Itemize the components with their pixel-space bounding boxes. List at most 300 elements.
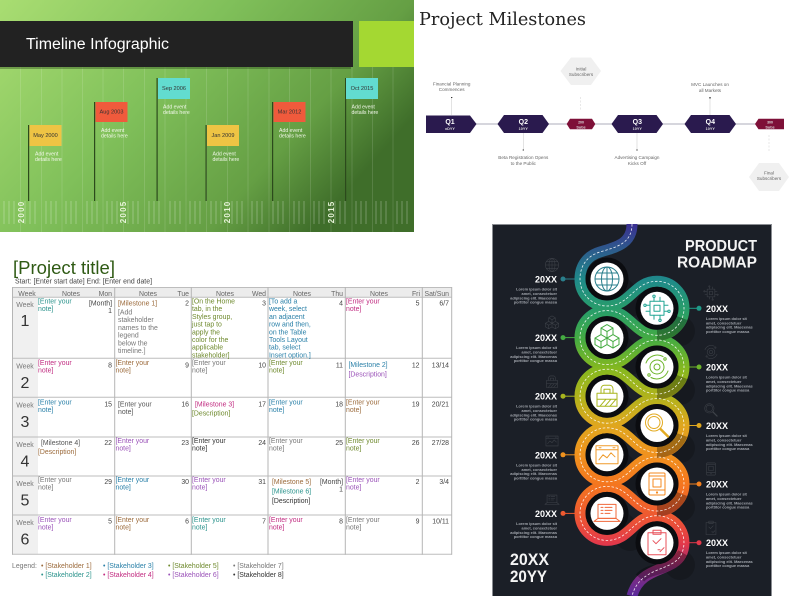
node: Q4 [684, 115, 736, 133]
week 5: 2 [416, 479, 420, 486]
milestone 1: 20XX [535, 274, 557, 284]
hexagon: final subscribers: Final [764, 170, 774, 176]
week 4: note] [116, 446, 131, 453]
week 3: 16 [181, 402, 189, 408]
week 1: note] [38, 306, 53, 313]
node: Q2: Q2 [519, 119, 528, 126]
milestone 2: Lorem ipsum dolor sit [706, 316, 748, 321]
milestone 1: porttitor congue massa [514, 300, 558, 304]
flag: Jan 2009 [206, 125, 239, 201]
node: Q2: 10YY [519, 127, 528, 131]
stems [452, 97, 710, 150]
milestone 6 [636, 404, 753, 451]
calendar table [12, 287, 452, 555]
week 5: note] [346, 485, 361, 492]
week 4: 4 [21, 454, 30, 470]
milestone 6: amet, consectetuer [706, 438, 742, 442]
week 2 [16, 360, 449, 392]
panel: timeline infographic [0, 0, 414, 232]
week 2: note] [192, 368, 207, 375]
node: 300 subs [755, 119, 784, 129]
week 1: 1 [108, 308, 112, 315]
week 4: 23 [181, 440, 189, 447]
flag: Jan 2009: Jan 2009 [211, 133, 235, 139]
legend: • [Stakeholder 7] [233, 563, 284, 570]
flag: Sep 2006: details here [163, 110, 190, 116]
week 6: note] [38, 525, 53, 532]
week 6: [Enter your [192, 517, 226, 524]
week 2: 13/14 [432, 362, 449, 370]
header row: Notes [370, 291, 389, 298]
milestone 8: adipiscing elit. Maecenas [706, 500, 753, 505]
header row: Wed [252, 291, 266, 298]
week 1: below the [118, 340, 148, 347]
week 3: 19 [412, 402, 420, 408]
week 4: 26 [412, 440, 420, 447]
week 2: [Enter your [192, 360, 226, 367]
milestone 2 [636, 286, 753, 334]
panel: product roadmap [492, 224, 772, 596]
week 5: 30 [181, 479, 189, 486]
node: 200 subs: Subs [576, 125, 586, 129]
milestone 2: adipiscing elit. Maecenas [706, 325, 753, 330]
header row: Week [18, 291, 36, 298]
week 1: stakeholder] [192, 352, 230, 359]
milestone 4: amet, consectetuer [706, 379, 742, 384]
milestone 5: porttitor congue massa [514, 417, 558, 422]
week 5: [Milestone 6] [272, 488, 311, 496]
milestone 9: porttitor congue massa [514, 534, 558, 539]
title: ROADMAP [677, 254, 757, 272]
date line: Start: [Enter start date] End: [Enter end date] [15, 278, 152, 286]
flag: Oct 2015 [345, 78, 378, 201]
year axis labels: 2015 [327, 201, 336, 223]
week 6: 7 [262, 518, 266, 526]
node: Q1 [426, 116, 476, 133]
week 6: 6 [21, 532, 30, 548]
week 1: just tap to [191, 322, 222, 329]
year axis labels [17, 201, 336, 223]
week 3: note] [269, 407, 284, 414]
header row: Fri [412, 291, 420, 298]
week 1: stakeholder [118, 317, 154, 324]
flag: Sep 2006: Sep 2006 [162, 86, 186, 92]
week 6: [Enter your [38, 517, 72, 524]
panel: project calendar [12, 257, 452, 579]
milestone 1 [510, 258, 628, 304]
week 2: [Enter your [116, 360, 149, 367]
week 4: [Enter your [192, 438, 226, 445]
milestone 3: amet, consectetuer [522, 350, 557, 354]
node: Q1: xDYY [445, 127, 455, 131]
legend [12, 563, 284, 579]
week 5: 3/4 [439, 479, 449, 486]
week 2: [Enter your [38, 360, 72, 367]
week 1: 1 [21, 313, 30, 330]
header row: Sat/Sun [424, 291, 449, 298]
milestone 8: Lorem ipsum dolor sit [706, 492, 748, 496]
week 1: legend [118, 333, 139, 340]
milestone 7: amet, consectetuer [522, 467, 557, 472]
milestone 1: Lorem ipsum dolor sit [516, 286, 558, 292]
node: Q4: Q4 [706, 119, 715, 126]
week 1: names to the [118, 325, 158, 332]
week 5: 29 [104, 479, 112, 486]
milestone 9: Lorem ipsum dolor sit [516, 521, 558, 526]
week 6: note] [116, 525, 131, 532]
week 1: 2 [185, 300, 189, 308]
week 5: 5 [21, 492, 30, 510]
flag: Jan 2009: Add event [212, 152, 236, 158]
week 6: note] [269, 525, 284, 532]
week 1: week, select [268, 306, 307, 313]
flag: Oct 2015: Add event [352, 104, 375, 110]
flag: May 2000: May 2000 [33, 133, 58, 139]
week 6: note] [346, 525, 361, 532]
flag: Mar 2012: Mar 2012 [278, 110, 301, 116]
week 5: [Enter your [346, 477, 380, 484]
week 4: note] [346, 446, 361, 453]
week 5: Week [16, 481, 34, 488]
header row: Notes [293, 291, 312, 298]
node: Q4: 10YY [706, 127, 715, 131]
header row: Mon [99, 291, 112, 298]
title: PRODUCT [685, 238, 757, 255]
milestone 10: adipiscing elit. Maecenas [706, 559, 753, 564]
circle shadows [607, 279, 680, 565]
week 3: [Milestone 3] [195, 402, 234, 408]
week 1: [Add [118, 310, 132, 316]
flag: Jan 2009: details here [212, 157, 239, 163]
week 5 [16, 477, 449, 510]
week 1: 3 [262, 300, 266, 308]
week 6: [Enter your [269, 517, 303, 524]
header row: Tue [177, 291, 189, 298]
milestone 3: Lorem ipsum dolor sit [516, 345, 558, 350]
timeline connector [476, 123, 756, 125]
week 2: 10 [258, 362, 266, 370]
milestone 4 [636, 345, 753, 392]
milestone 3: porttitor congue massa [514, 358, 558, 363]
week 5: [Description] [272, 498, 310, 505]
milestone 5: Lorem ipsum dolor sit [516, 404, 558, 409]
flag: May 2000: Add event [35, 152, 59, 158]
milestone 10: 20XX [706, 538, 728, 548]
flag: Aug 2003: details here [101, 134, 128, 140]
week 1: tab, in the [192, 306, 222, 313]
flag: Sep 2006: Add event [163, 104, 187, 110]
week 5: [Enter your [116, 477, 149, 484]
week 2: note] [38, 368, 53, 375]
week 4: 24 [258, 440, 266, 447]
date range: 20YY [510, 568, 547, 586]
legend: • [Stakeholder 4] [103, 572, 154, 579]
week 1: [To add a [269, 298, 297, 306]
week 1: [Milestone 1] [118, 300, 157, 308]
legend: • [Stakeholder 8] [233, 572, 284, 579]
week 5: [Enter your [192, 477, 226, 484]
milestone 4: Lorem ipsum dolor sit [706, 374, 748, 380]
legend: Legend: [12, 563, 37, 570]
legend: • [Stakeholder 6] [168, 572, 219, 579]
week 3: note] [118, 409, 133, 416]
week 3: [Enter your [118, 402, 152, 408]
label: beta registration: to the Public [511, 161, 537, 166]
milestone 3: adipiscing elit. Maecenas [510, 354, 557, 359]
label: beta registration: Beta Registration Opens [498, 155, 549, 160]
hexagon: final subscribers: Subscribers [757, 176, 782, 181]
milestone 7: Lorem ipsum dolor sit [516, 462, 558, 467]
node: 300 subs: Subs [765, 125, 775, 129]
week 5: note] [38, 485, 53, 492]
flag: Aug 2003: Add event [101, 128, 125, 134]
flag: Mar 2012: details here [279, 134, 306, 140]
year axis labels: 2010 [223, 201, 232, 223]
header row: Thu [331, 291, 343, 298]
milestone 5 [510, 375, 628, 422]
week 2: [Milestone 2] [348, 362, 388, 369]
hexagon: initial subscribers: Initial [576, 66, 586, 72]
week 6: [Enter your [346, 517, 380, 524]
flag: Oct 2015: details here [352, 110, 378, 116]
flag: May 2000: details here [35, 157, 62, 163]
project title: [Project title] [13, 257, 115, 278]
week 5: [Milestone 5] [272, 479, 311, 486]
legend: • [Stakeholder 2] [41, 572, 92, 579]
flag: Mar 2012 [272, 102, 306, 201]
milestone 8: amet, consectetuer [706, 496, 742, 501]
week 2: Week [16, 364, 34, 370]
date range [510, 551, 549, 586]
node: 200 subs [567, 119, 595, 129]
header row: Notes [62, 291, 81, 298]
week 6: 9 [416, 518, 420, 526]
week 1: Styles group, [192, 314, 232, 321]
week 6: [Enter your [116, 517, 149, 524]
week 5: [Enter your [38, 477, 72, 484]
week 6 [16, 517, 449, 548]
week 1: 6/7 [439, 300, 449, 308]
week 3 [16, 400, 449, 431]
milestone 3 [510, 316, 628, 363]
title: Timeline Infographic [26, 36, 169, 53]
label: advertising campaign: Advertising Campaign [615, 155, 660, 160]
header row: Notes [216, 291, 235, 298]
week 2: note] [116, 368, 131, 375]
week 1: 5 [416, 300, 420, 308]
year axis labels: 2000 [17, 201, 26, 223]
week 1: timeline.] [118, 348, 146, 355]
legend: • [Stakeholder 3] [103, 563, 154, 570]
week 5: note] [116, 485, 131, 492]
week 6: 8 [339, 518, 343, 526]
label: MVC launches [691, 82, 729, 93]
panel: project milestones [419, 9, 789, 191]
week 1: apply the [192, 329, 220, 336]
week 1 [16, 298, 449, 359]
legend: • [Stakeholder 1] [41, 563, 92, 570]
week 4: [Description] [38, 449, 76, 456]
node: 300 subs: 300 [767, 120, 773, 124]
title: Project Milestones [419, 9, 586, 30]
label: MVC launches: MVC Launches on [691, 82, 729, 87]
milestone 3: 20XX [535, 333, 557, 343]
week 3: [Description] [192, 410, 230, 418]
week 1: tab, select [269, 345, 300, 352]
week 6: note] [192, 525, 207, 532]
week 4: 22 [104, 440, 112, 447]
week 6: 10/11 [432, 518, 449, 526]
week 1: color for the [192, 337, 229, 344]
label: advertising campaign: Kicks Off [628, 161, 647, 166]
flag: May 2000 [28, 125, 62, 201]
milestone 10: porttitor congue massa [706, 563, 750, 568]
week 4: note] [269, 446, 284, 453]
week 6: Week [16, 520, 34, 527]
week 2: 12 [412, 362, 420, 370]
milestone 7 [510, 433, 628, 480]
milestone 2: amet, consectetuer [706, 320, 742, 325]
week 3: note] [38, 407, 53, 414]
header bar [0, 21, 353, 69]
week 1: 4 [339, 300, 343, 308]
milestone 9 [510, 492, 628, 539]
milestone 4: porttitor congue massa [706, 388, 750, 392]
milestone 10 [636, 521, 753, 568]
milestone 5: 20XX [535, 392, 557, 402]
week 3: 20/21 [432, 402, 449, 408]
week 6: 6 [185, 518, 189, 526]
week 3: 3 [21, 414, 30, 431]
milestone 9: adipiscing elit. Maecenas [510, 530, 557, 535]
milestone 4: adipiscing elit. Maecenas [706, 383, 753, 388]
week 1: [On the Home [192, 298, 235, 306]
week 1: Insert option.] [269, 352, 311, 359]
milestone 9: 20XX [535, 509, 557, 519]
week 4: [Enter your [346, 438, 380, 445]
label: financial planning: Financial Planning [433, 82, 471, 86]
week 4: [Enter your [269, 438, 303, 445]
milestone 6: 20XX [706, 421, 728, 431]
milestone 7: 20XX [535, 450, 557, 460]
legend: • [Stakeholder 5] [168, 563, 219, 570]
week 4: 27/28 [432, 440, 449, 447]
label: MVC launches: all Markets [699, 88, 722, 93]
hexagon: final subscribers [749, 163, 789, 191]
week 3: Week [16, 402, 34, 410]
milestone 7: adipiscing elit. Maecenas [510, 471, 557, 476]
week 1: row and then, [269, 322, 311, 329]
week 3: 15 [104, 402, 112, 408]
flag: Mar 2012: Add event [279, 128, 303, 134]
accent square [359, 21, 414, 67]
week 3: 17 [258, 402, 266, 408]
milestone 6: adipiscing elit. Maecenas [706, 442, 753, 447]
week 4: Week [16, 442, 34, 449]
week 2: 2 [21, 375, 30, 392]
week 1: note] [346, 306, 361, 313]
winding road [580, 224, 684, 596]
week 4: [Enter your [116, 438, 149, 445]
week 1: [Enter your [346, 298, 380, 306]
week 2: 11 [336, 362, 343, 370]
week 1: Week [16, 302, 34, 309]
node: Q2 [498, 115, 549, 133]
milestone 7: porttitor congue massa [514, 475, 558, 480]
week 5: 31 [258, 479, 266, 486]
week 1: on the Table [269, 329, 307, 336]
milestone 1: amet, consectetuer [522, 291, 557, 296]
milestone 6: Lorem ipsum dolor sit [706, 433, 748, 438]
title [677, 238, 757, 272]
flag: Aug 2003 [94, 102, 128, 201]
week 2: note] [269, 368, 284, 375]
node: 200 subs: 200 [578, 120, 584, 124]
week 2: [Enter your [269, 360, 303, 367]
node: Q1: Q1 [445, 119, 455, 126]
week 4: [Milestone 4] [41, 440, 80, 447]
flag: Sep 2006 [156, 78, 190, 201]
milestone 10: Lorem ipsum dolor sit [706, 550, 748, 555]
flag: Oct 2015: Oct 2015 [351, 86, 373, 92]
week 2: [Description] [348, 372, 387, 378]
milestone 8: porttitor congue massa [706, 504, 750, 510]
week 1: Tools Layout [269, 337, 308, 344]
milestone 1: adipiscing elit. Maecenas [510, 295, 557, 300]
flag: Aug 2003: Aug 2003 [100, 110, 123, 116]
node: Q3: 10YY [633, 127, 642, 131]
week 1: an adjacent [269, 314, 305, 321]
week 3: [Enter your [38, 400, 72, 406]
week 3: 18 [335, 402, 343, 408]
week 5: 1 [339, 487, 343, 494]
milestone 2: porttitor congue massa [706, 329, 750, 334]
week 4 [16, 438, 449, 470]
milestone 6: porttitor congue massa [706, 446, 750, 451]
week 5: [Month] [320, 479, 343, 486]
milestone 5: amet, consectetuer [522, 408, 557, 413]
hexagon: initial subscribers [560, 58, 601, 85]
milestone 5: adipiscing elit. Maecenas [510, 412, 557, 418]
week 6: 5 [108, 518, 112, 526]
milestone 2: 20XX [706, 304, 728, 314]
week 1: [Month] [89, 300, 112, 308]
week 3: [Enter your [346, 400, 380, 406]
week 4: 25 [335, 440, 343, 447]
header row [18, 291, 449, 298]
week 1: [Enter your [38, 298, 72, 306]
week 3: [Enter your [269, 400, 303, 406]
milestone 10: amet, consectetuer [706, 555, 742, 560]
week 2: 8 [108, 362, 112, 370]
label: financial planning [433, 82, 471, 92]
node: Q3 [612, 115, 663, 133]
week 4: note] [192, 446, 207, 453]
label: advertising campaign [615, 155, 660, 166]
node: Q3: Q3 [633, 119, 642, 126]
header row: Notes [139, 291, 158, 298]
year axis labels: 2005 [119, 201, 128, 223]
week 3: note] [346, 407, 361, 414]
hexagon: initial subscribers: Subscribers [569, 72, 594, 77]
milestone 9: amet, consectetuer [522, 526, 557, 530]
milestone 8 [636, 462, 753, 510]
milestone 4: 20XX [706, 362, 728, 372]
week 5: note] [192, 485, 207, 492]
date range: 20XX [510, 551, 549, 569]
label: beta registration [498, 155, 549, 166]
week 1: applicable [192, 345, 223, 352]
